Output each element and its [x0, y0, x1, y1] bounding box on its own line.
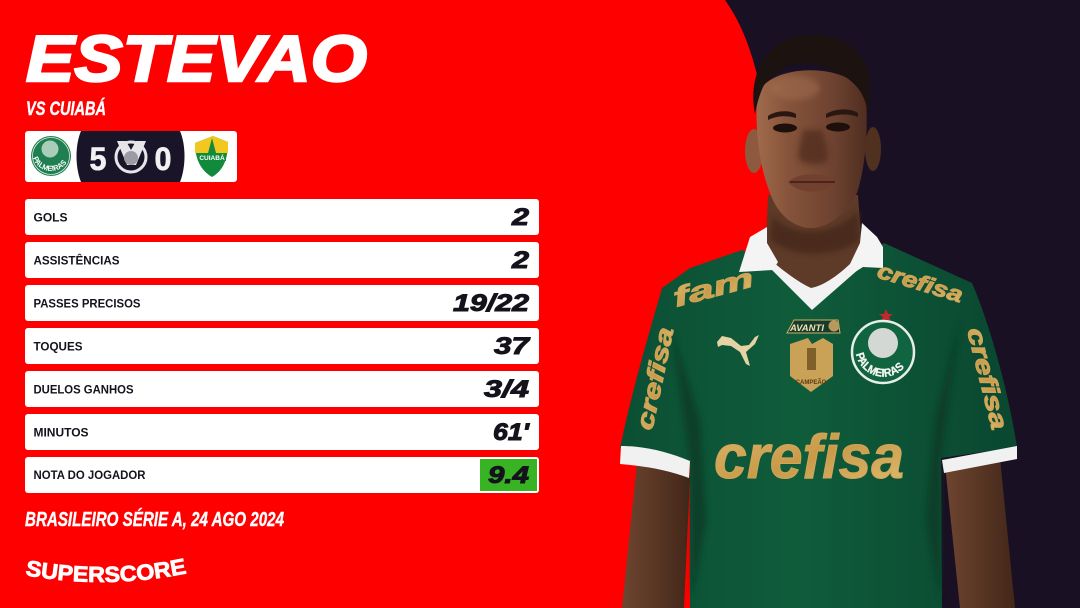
ears	[745, 129, 763, 173]
sponsor: right shoulder: crefisa	[875, 258, 966, 308]
patch: Avanti: AVANTI	[789, 323, 824, 334]
competition and date: BRASILEIRO SÉRIE A, 24 AGO 2024	[25, 508, 284, 531]
sleeve cuffs	[620, 446, 690, 478]
icon: red star	[879, 309, 893, 322]
eyes	[773, 124, 797, 132]
stat row: gols: GOLS	[34, 210, 68, 224]
stat row: gols	[25, 199, 539, 235]
background: red panel	[0, 0, 773, 608]
stat row: assistências: 2	[511, 247, 530, 274]
sponsor: chest: crefisa	[714, 423, 904, 492]
stat row: duelos ganhos: DUELOS GANHOS	[34, 382, 134, 396]
collar: left wing	[739, 227, 778, 272]
stat row: passes precisos: 19/22	[453, 290, 530, 317]
collar: right wing	[850, 223, 883, 272]
jersey crest	[850, 320, 916, 384]
patch: champion badge: CAMPEÃO	[796, 379, 827, 386]
stat row: minutos: MINUTOS	[34, 426, 88, 440]
hair	[753, 35, 870, 114]
forehead highlight	[770, 76, 820, 100]
stat row: assistências	[25, 242, 539, 278]
match score panel	[25, 131, 237, 182]
nose	[798, 130, 828, 164]
jersey crest: PALMEIRAS	[856, 352, 904, 377]
rating badge	[480, 459, 537, 491]
player head	[745, 35, 881, 228]
jersey shadows	[672, 330, 706, 600]
icon: Palmeiras crest: PALMEIRAS	[33, 156, 66, 171]
stat row: passes precisos: PASSES PRECISOS	[34, 296, 140, 310]
icon: Palmeiras crest	[31, 136, 71, 176]
icon: Cuiabá crest: CUIABÁ	[199, 153, 225, 162]
stat row: assistências: ASSISTÊNCIAS	[34, 252, 120, 268]
player arms	[622, 458, 1015, 608]
jersey	[620, 195, 1017, 608]
stat row: minutos	[25, 414, 539, 450]
patch: champion badge	[790, 338, 833, 392]
stat row: duelos ganhos	[25, 371, 539, 407]
icon: Cuiabá crest	[195, 136, 228, 177]
stat row: nota do jogador: 9.4	[488, 462, 529, 489]
title: ESTEVAO	[26, 22, 367, 95]
stat row: minutos: 61'	[493, 419, 530, 446]
player photo	[620, 34, 1017, 608]
stat row: duelos ganhos: 3/4	[484, 376, 529, 403]
sponsor: left shoulder: fam	[670, 263, 757, 313]
sponsor: right sleeve: crefisa	[961, 325, 1013, 432]
home score: 5	[90, 141, 106, 177]
undershirt V	[768, 250, 860, 310]
brows	[768, 111, 796, 120]
player neck	[766, 195, 862, 288]
stat row: toques	[25, 328, 539, 364]
patch: Avanti	[787, 320, 840, 334]
brand logo: SUPERSCORE	[26, 558, 187, 582]
face	[757, 70, 867, 228]
mouth	[788, 174, 837, 192]
stat row: nota do jogador: NOTA DO JOGADOR	[34, 468, 146, 482]
stat row: gols: 2	[511, 204, 530, 231]
away score: 0	[154, 141, 172, 177]
stat row: toques: TOQUES	[34, 340, 82, 354]
logo: puma	[717, 335, 759, 366]
score pill	[76, 131, 184, 182]
stat row: passes precisos	[25, 285, 539, 321]
stat row: toques: 37	[494, 333, 531, 360]
sponsor: left sleeve: crefisa	[631, 325, 679, 432]
icon: league emblem	[116, 141, 146, 172]
subtitle: opponent: VS CUIABÁ	[26, 98, 106, 120]
stat row: nota do jogador	[25, 457, 539, 493]
